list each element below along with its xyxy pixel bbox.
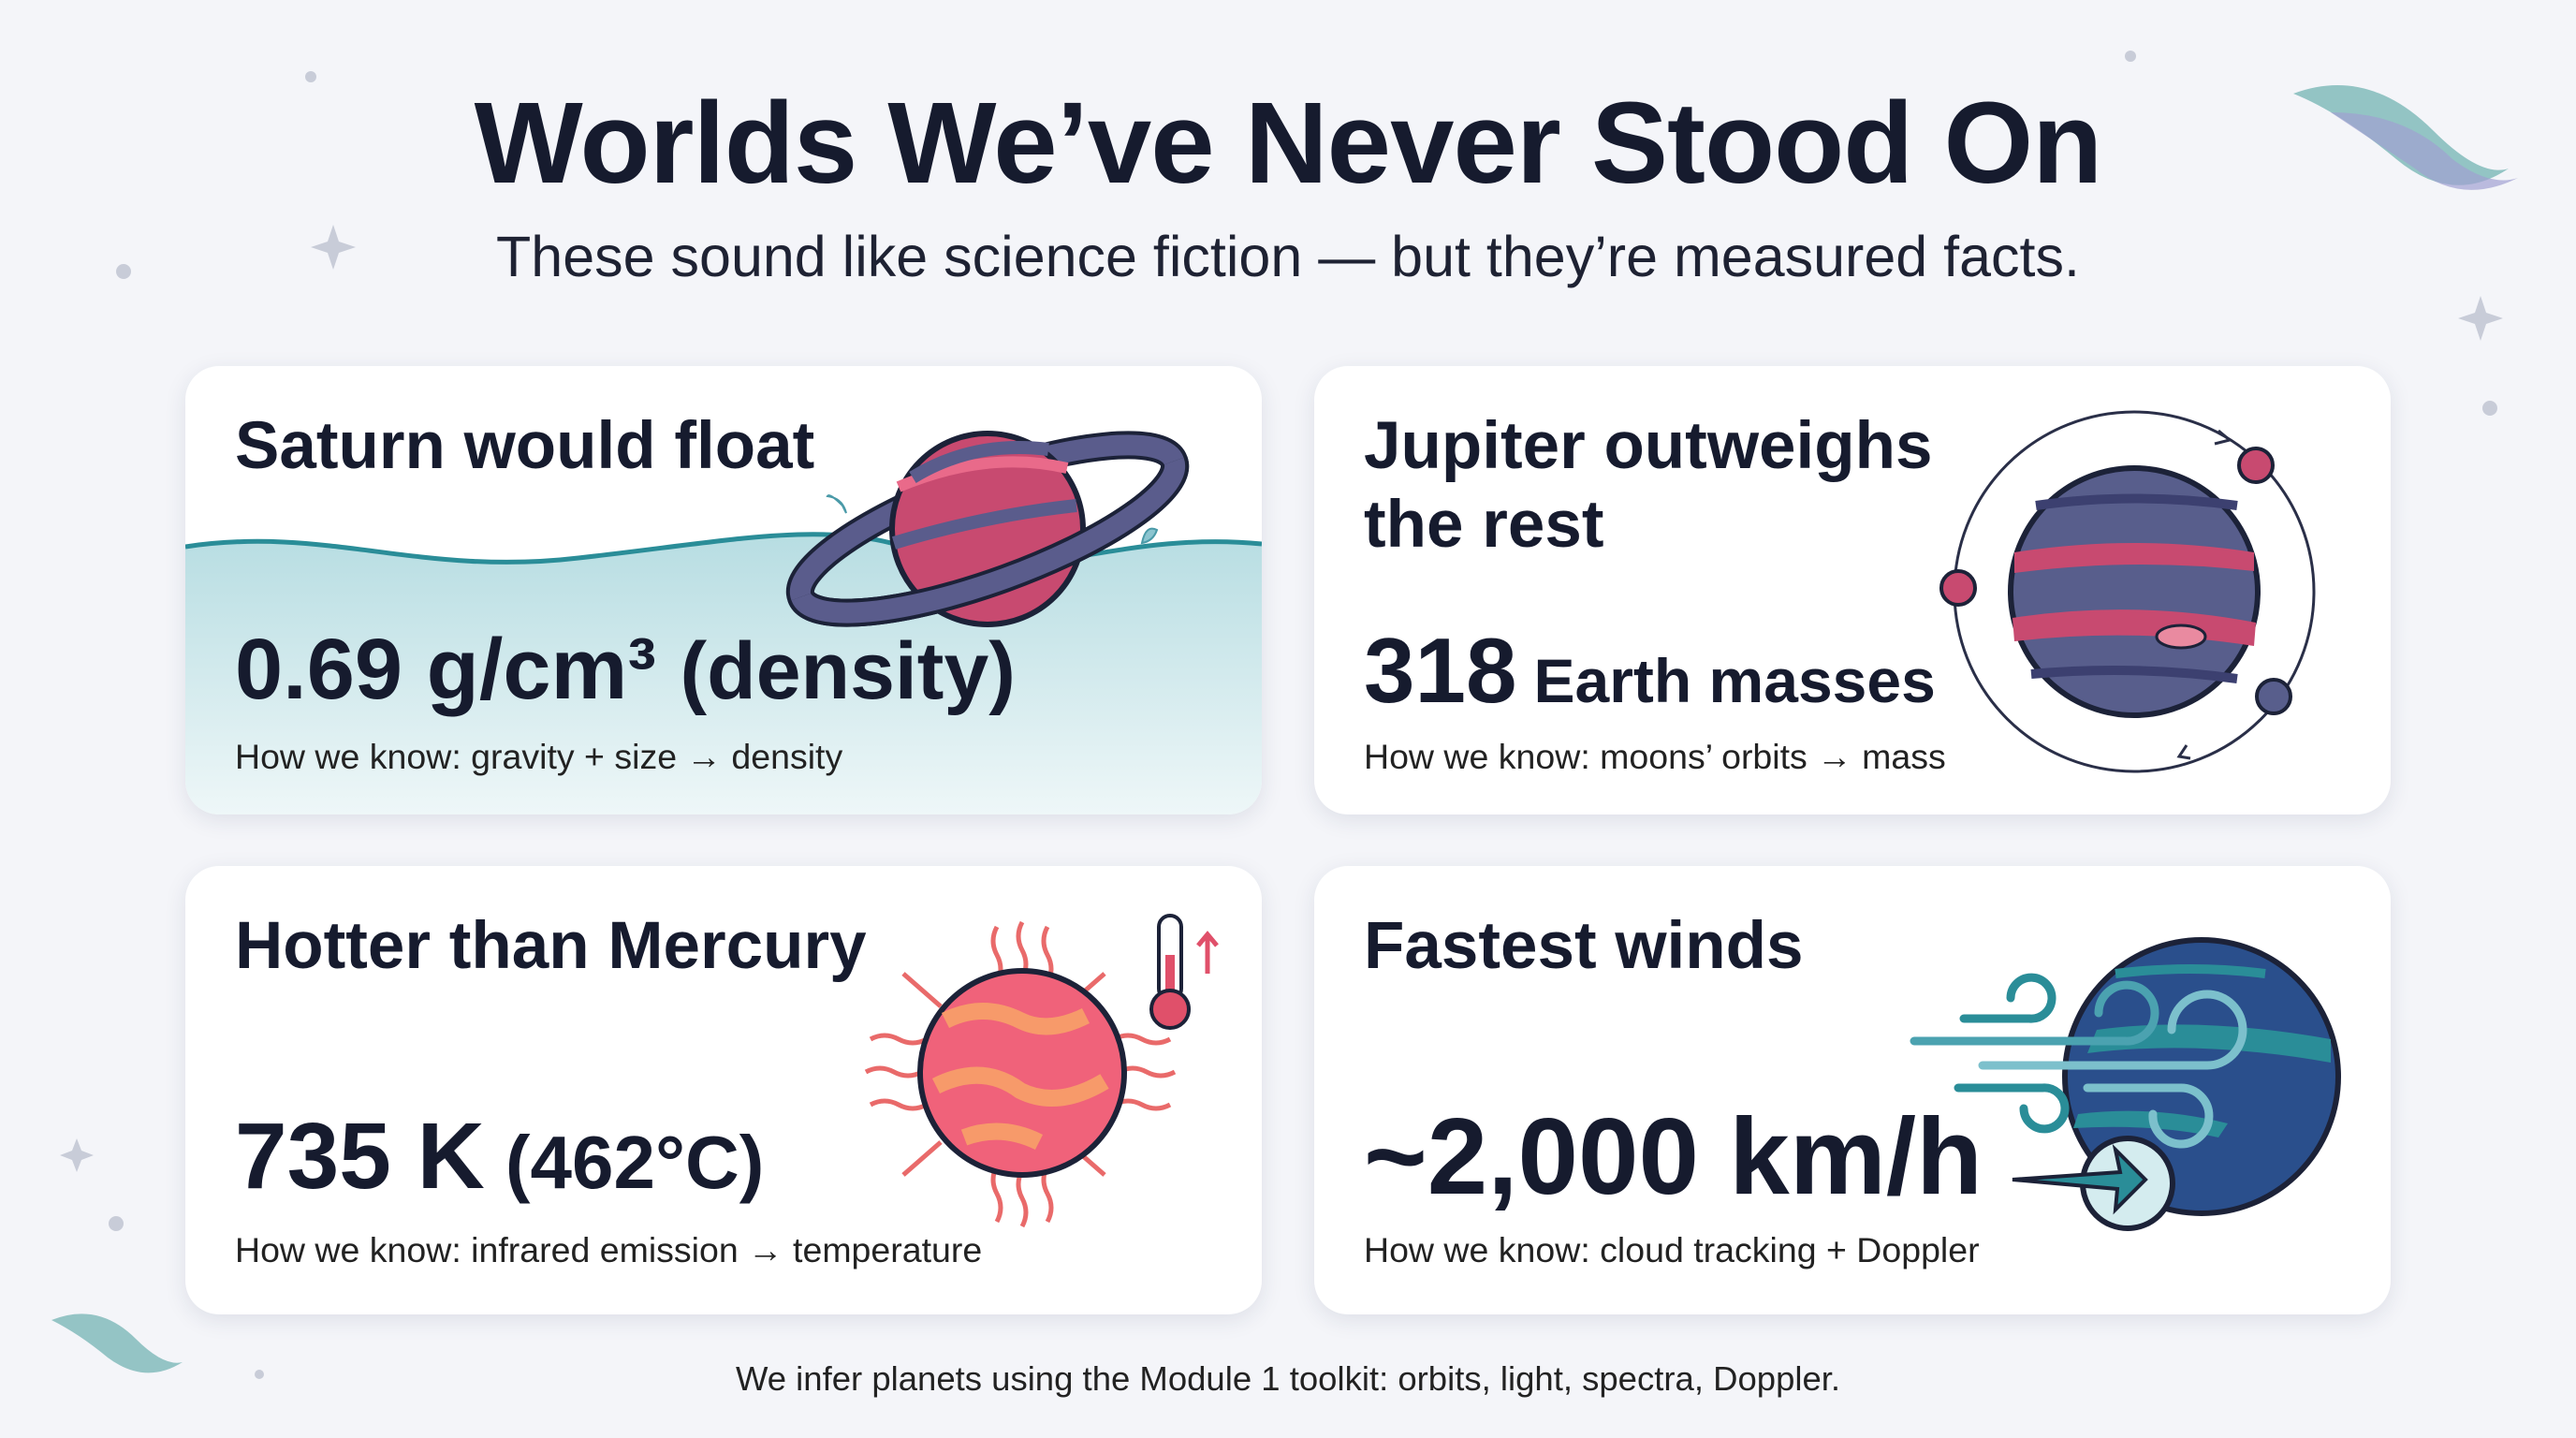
icon: Jupiter with moons [1941,412,2314,771]
decoration: nebula top right [2293,85,2518,190]
heading: Hotter than Mercury [235,909,867,983]
how we know: How we know: gravity + size → density [235,737,842,776]
panel: Hot [185,866,1262,1314]
footer: We infer planets using the Module 1 toolkit: orbits, light, spectra, Doppler. [736,1359,1840,1398]
heading: the rest [1364,488,1603,562]
panel: Saturn [185,366,1262,814]
heading: Saturn would float [235,409,814,483]
heading [1364,409,1932,562]
how we know: How we know: infrared emission → temperature [235,1230,982,1269]
thermometer [1159,916,1181,1000]
panel: Winds [1314,866,2391,1314]
how we know: How we know: cloud tracking + Doppler [1364,1230,1980,1269]
icon: hot planet [866,916,1217,1226]
icon: Saturn [783,412,1192,646]
panel: Jupiter [1314,366,2391,814]
title: Worlds We’ve Never Stood On [475,80,2101,208]
water background [185,532,1262,814]
stat: 0.69 g/cm³ (density) [235,622,1016,717]
icon: windy planet [1914,940,2338,1228]
stat: 735 K (462°C) [235,1104,764,1209]
decoration: nebula bottom left [51,1313,183,1372]
subtitle: These sound like science fiction — but they’re measured facts. [496,225,2080,288]
heading: Jupiter outweighs [1364,409,1932,483]
stat: ~2,000 km/h [1364,1095,1983,1217]
heading: Fastest winds [1364,909,1804,983]
how we know: How we know: moons’ orbits → mass [1364,737,1946,776]
stat: 318 Earth masses [1364,619,1936,722]
